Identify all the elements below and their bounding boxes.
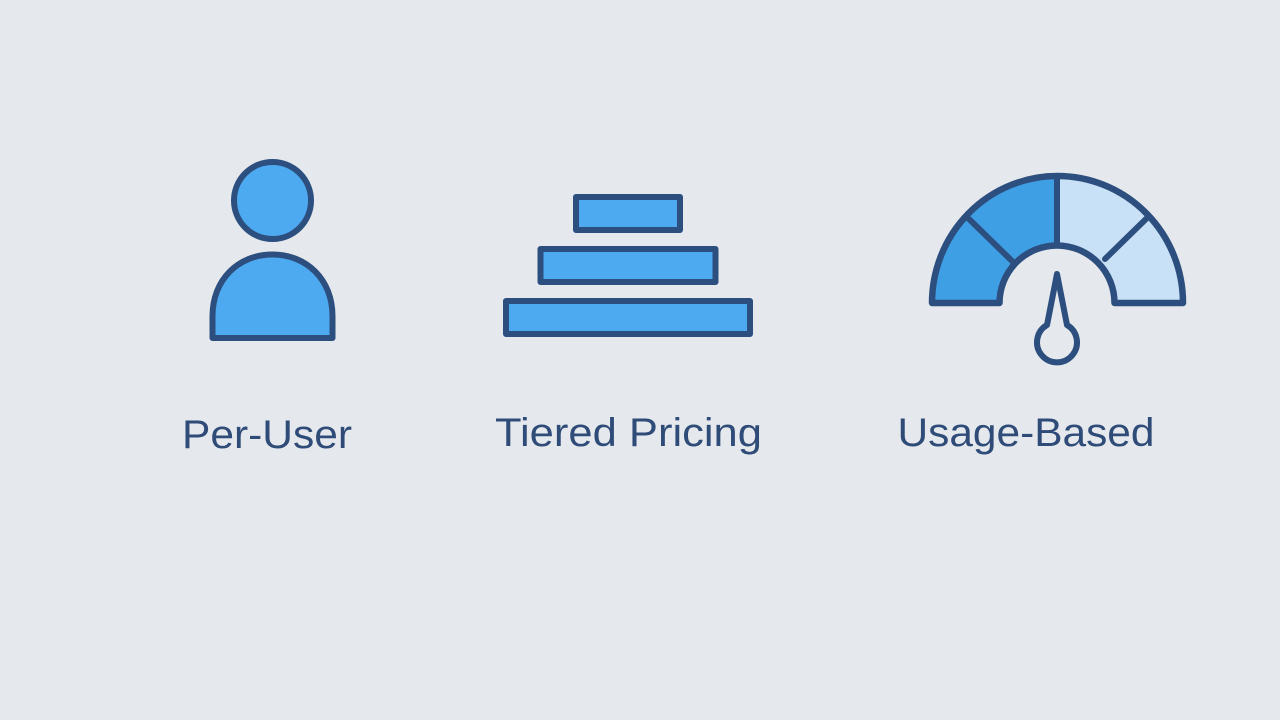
label: tiered pricing: Tiered Pricing <box>495 411 762 455</box>
icon: stacked tiers <box>506 197 750 334</box>
panel: per-user <box>182 162 352 457</box>
panel: usage-based <box>898 176 1183 455</box>
gauge dividers <box>969 177 1147 261</box>
icon: person <box>212 162 332 338</box>
panel: tiered pricing <box>495 197 762 455</box>
icon: gauge <box>932 176 1183 362</box>
gauge outline <box>932 176 1183 303</box>
gauge needle <box>1037 274 1077 362</box>
gauge dark half <box>932 176 1058 303</box>
label: per-user: Per-User <box>182 413 352 457</box>
label: usage-based: Usage-Based <box>898 411 1154 455</box>
gauge light half <box>1058 176 1183 303</box>
